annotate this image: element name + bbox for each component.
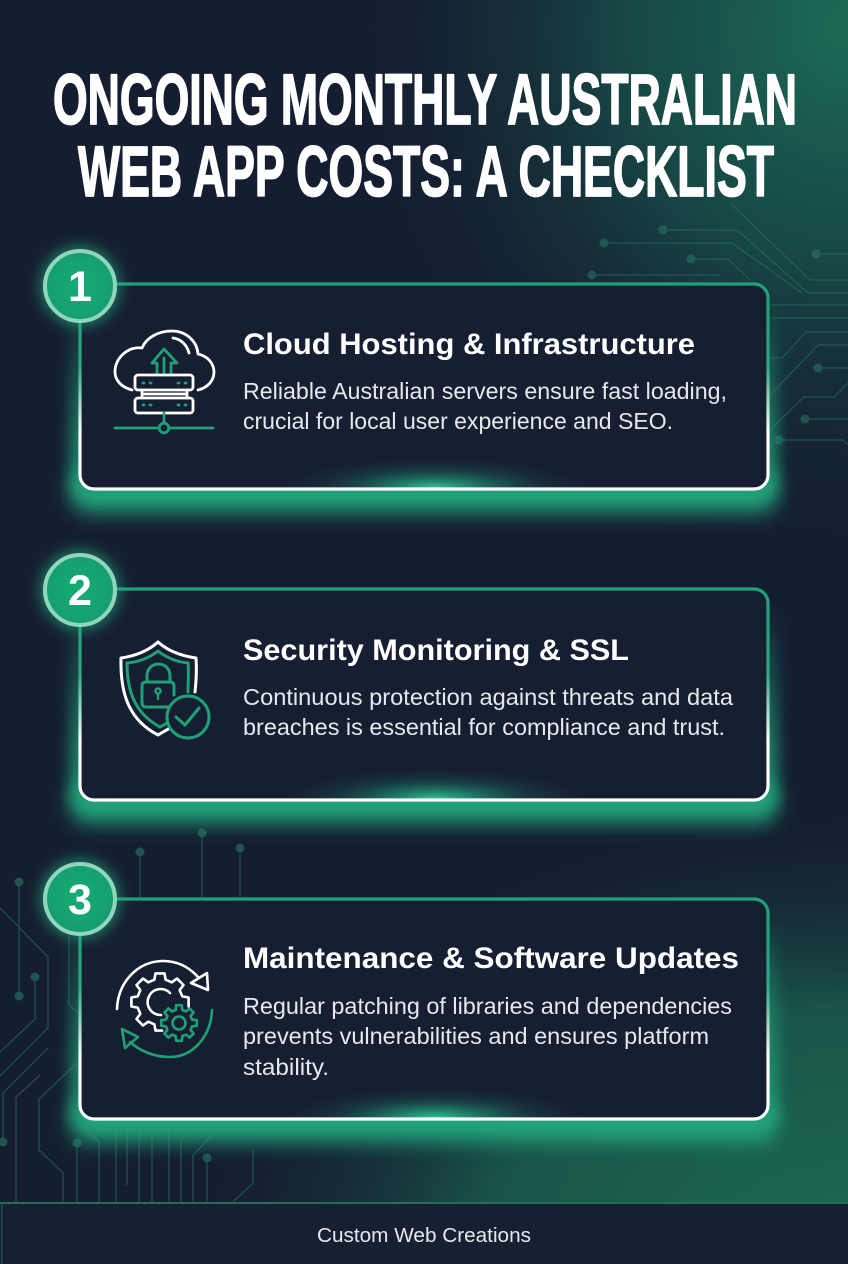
- number badge 2: [40, 550, 120, 630]
- text: maintenance description: [243, 993, 732, 1080]
- icon: shield: [121, 642, 209, 738]
- text: cloud hosting description: crucial for local user experience and SEO.: [243, 408, 673, 434]
- text: maintenance description: stability.: [243, 1054, 329, 1080]
- icon: cloud server: [115, 331, 214, 433]
- text: security description: Continuous protection against threats and data: [243, 684, 733, 710]
- panel: security monitoring: [40, 550, 778, 823]
- number badge 2: 2: [68, 567, 92, 615]
- text: cloud hosting description: Reliable Australian servers ensure fast loading,: [243, 378, 727, 404]
- footer text: Custom Web Creations: [317, 1225, 531, 1247]
- title: [53, 61, 797, 212]
- text: security description: breaches is essential for compliance and trust.: [243, 714, 725, 740]
- number badge 3: 3: [68, 876, 92, 924]
- heading: cloud hosting: Cloud Hosting & Infrastructure: [243, 328, 695, 361]
- number badge 3: [40, 859, 120, 939]
- text: maintenance description: prevents vulnerabilities and ensures platform: [243, 1023, 709, 1049]
- panel: cloud hosting: [40, 246, 778, 512]
- circuit lines top right: [588, 203, 848, 445]
- icon: gears and arrows: [117, 961, 212, 1057]
- panel: maintenance: [40, 859, 778, 1142]
- text: cloud hosting description: [243, 378, 727, 434]
- text: security description: [243, 684, 733, 740]
- circuit lines bottom left: [0, 828, 253, 1202]
- footer bar: [0, 1202, 848, 1264]
- text: maintenance description: Regular patching of libraries and dependencies: [243, 993, 732, 1019]
- number badge 1: 1: [68, 263, 92, 311]
- number badge 1: [40, 246, 120, 326]
- heading: maintenance: Maintenance & Software Updates: [243, 942, 739, 975]
- heading: security monitoring: Security Monitoring & SSL: [243, 634, 629, 667]
